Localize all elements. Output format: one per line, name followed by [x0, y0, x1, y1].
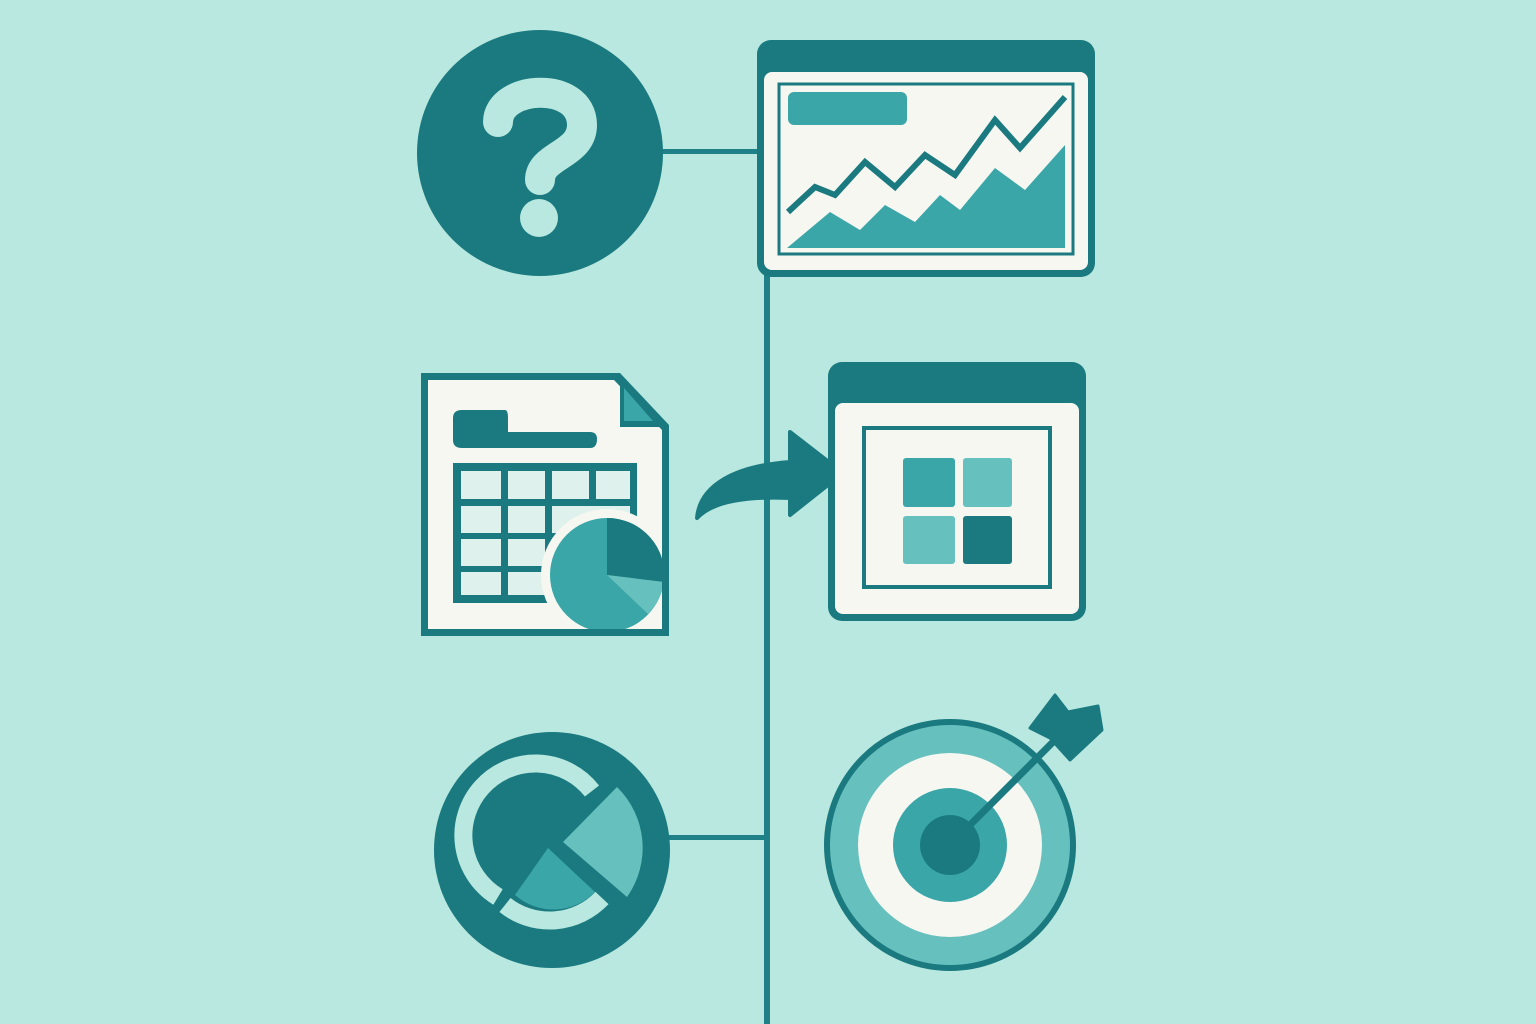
panel: grid window — [828, 362, 1086, 621]
icon: target with arrow — [827, 695, 1102, 968]
arrow: curved — [697, 432, 843, 518]
chart: zigzag line and area — [787, 97, 1065, 248]
timeline: vertical connector — [660, 149, 770, 1024]
chart: pie — [541, 509, 662, 629]
icon: four squares — [903, 458, 1012, 564]
panel: line chart window — [757, 40, 1095, 277]
icon: segmented circle — [434, 732, 670, 968]
icon: question circle — [417, 30, 663, 276]
icon: spreadsheet document with pie — [421, 373, 673, 641]
